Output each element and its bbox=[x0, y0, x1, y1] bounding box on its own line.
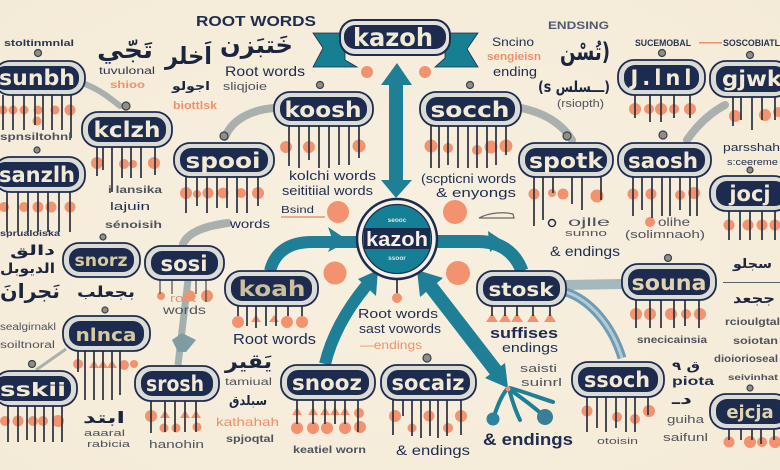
arrow head: lower left bbox=[358, 270, 378, 296]
node: koah bbox=[225, 271, 318, 328]
node: socaiz bbox=[381, 365, 476, 438]
text block: kathahah group: يَقير bbox=[224, 349, 272, 373]
orange badge small right bbox=[419, 66, 431, 78]
hub leg with dot bbox=[392, 278, 402, 303]
node: koosh: koosh bbox=[284, 98, 362, 122]
arrow: vertical double-headed bbox=[381, 63, 412, 198]
text block: far right column: dioiorioseal bbox=[714, 354, 778, 365]
text block: bottom right labels: saifunl bbox=[663, 432, 708, 444]
text block: suffixes: suinrl bbox=[521, 377, 562, 389]
node: sskii bbox=[0, 371, 77, 442]
connector: sosi to srosh bbox=[172, 280, 196, 365]
text block: top left arabic group: tuvulonal bbox=[99, 66, 155, 77]
arrow splayed ends bbox=[494, 388, 553, 420]
text block: kathahah group bbox=[216, 349, 279, 445]
node: bottom right bbox=[710, 394, 780, 448]
text block: kathahah group: tamiual bbox=[225, 377, 272, 388]
hub circle: kazoh: seooc bbox=[388, 217, 407, 224]
node: souna bbox=[622, 264, 716, 328]
text block: left mid: lajuin bbox=[110, 201, 150, 213]
orange badge upper left bbox=[327, 201, 349, 223]
text block: centre root words bbox=[358, 306, 442, 352]
text block: left arabic column: soiltnoral bbox=[0, 340, 55, 351]
text block: right mid: ojlle bbox=[568, 215, 611, 229]
text block: top centre endings: (s ـــسلس) bbox=[538, 78, 610, 96]
node: kelzh: kclzh bbox=[94, 118, 160, 142]
text block: top left arabic group: biottlsk bbox=[173, 100, 218, 112]
arrow: left curved from hub bbox=[270, 242, 360, 271]
node: sunbh bbox=[0, 61, 85, 138]
node: sosi: sosi bbox=[160, 252, 208, 276]
text block: right mid: olihe bbox=[658, 215, 690, 229]
text: & endings upper: & endings bbox=[550, 244, 620, 259]
node: koosh bbox=[274, 92, 373, 168]
text block: bottom right labels bbox=[597, 335, 714, 446]
connector: sunbh to kelzh bbox=[85, 84, 120, 106]
underline scribbles bbox=[281, 213, 514, 218]
text block: suffixes: saisti bbox=[520, 363, 557, 375]
text block: bottom left: ابتد bbox=[83, 408, 125, 427]
node: jnl bbox=[618, 60, 705, 122]
text block: bottom left bbox=[83, 408, 366, 456]
text block: bottom right labels: otoisin bbox=[597, 436, 638, 446]
node: srosh: srosh bbox=[146, 372, 204, 396]
text block: top left arabic group: spnsiltohnl bbox=[0, 132, 72, 143]
text block: top right labels: SOSCOBIATL bbox=[723, 38, 780, 48]
text block: sosi words: root bbox=[170, 293, 196, 305]
text block: suffixes bbox=[490, 325, 562, 389]
node: spotk bbox=[519, 143, 613, 226]
text block: left arabic column: الديوبل bbox=[0, 261, 55, 277]
text block: koosh words bbox=[229, 168, 377, 231]
arrow: right curved from hub bbox=[430, 242, 522, 271]
text block: far right column: سجلو bbox=[732, 257, 772, 272]
text block: bottom left: aaaral bbox=[84, 428, 125, 438]
text block: top left arabic group: تَجّي bbox=[97, 36, 153, 64]
text block: kathahah group: kathahah bbox=[216, 415, 279, 429]
orange badge small left bbox=[361, 66, 373, 78]
heading: endings: ENDSING bbox=[548, 20, 609, 32]
node: gjwk: gjwk bbox=[722, 67, 780, 91]
text block: top left arabic group: sliqjoie bbox=[223, 81, 267, 93]
text block: top centre endings: Sncino bbox=[492, 35, 534, 49]
text block: far right column: ججعد bbox=[733, 291, 775, 307]
node: sanzlh bbox=[0, 157, 85, 232]
text block: far right column bbox=[714, 257, 780, 382]
text block: top centre endings: ending bbox=[493, 65, 537, 79]
node: nlnca bbox=[63, 316, 150, 400]
node: bottom right: ejcja bbox=[726, 402, 774, 423]
node: ssoch bbox=[572, 362, 664, 432]
text block: bottom left: keatiel worn bbox=[293, 445, 366, 456]
node: spooi: spooi bbox=[186, 149, 260, 173]
node: souna: souna bbox=[632, 271, 706, 295]
text block: socch words bbox=[421, 171, 517, 200]
arrow head: right small bbox=[488, 231, 503, 252]
connector: socch to spotk bbox=[521, 108, 572, 140]
text block: top centre endings bbox=[487, 35, 610, 110]
banner: kazoh bbox=[313, 20, 478, 67]
text block: far right column: soiotan bbox=[733, 336, 778, 347]
text block: left arabic column: بجعلب bbox=[77, 283, 135, 301]
node: socaiz: socaiz bbox=[392, 371, 464, 395]
text: & endings lower: & endings bbox=[396, 443, 470, 458]
connector: stock to souna bbox=[566, 284, 622, 285]
text block: bottom right labels: snecicainsia bbox=[637, 335, 708, 346]
node: spooi bbox=[174, 143, 274, 213]
text block: bottom right labels: guiha bbox=[667, 414, 705, 426]
text block: right mid bbox=[565, 142, 780, 241]
text block: bottom right labels: ق ٩ bbox=[672, 359, 700, 373]
node: ssoch: ssoch bbox=[584, 368, 650, 392]
text block: bottom left: rabicia bbox=[87, 439, 130, 449]
text block: far right column: seivinhat bbox=[728, 372, 778, 382]
node: sunbh: sunbh bbox=[0, 66, 75, 90]
node: sanzlh: sanzlh bbox=[0, 163, 75, 187]
hub circle: kazoh: ssoor bbox=[388, 255, 406, 262]
text block: top left arabic group: shioo bbox=[110, 80, 145, 91]
node: snooz bbox=[281, 365, 375, 434]
orange badge upper right bbox=[443, 200, 467, 224]
node: saosh: saosh bbox=[628, 149, 698, 173]
text block: left arabic column bbox=[0, 243, 135, 351]
node: nlnca: nlnca bbox=[76, 325, 136, 346]
text block: left mid: i lansika bbox=[108, 185, 163, 196]
orange badge lower right bbox=[446, 261, 470, 285]
node: koah: koah bbox=[238, 277, 306, 301]
text block: top left arabic group: stoltinmnlal bbox=[4, 38, 74, 48]
connector: koosh to spooi bbox=[225, 108, 274, 137]
text: root words: Root words bbox=[233, 331, 316, 348]
node: sskii: sskii bbox=[0, 379, 66, 401]
text block: bottom right labels: دـ bbox=[670, 392, 692, 408]
text block: top left arabic group: Root words bbox=[225, 63, 305, 79]
text block: left mid: sprualoiska bbox=[0, 229, 61, 238]
text block: far right column: rcioulgtal bbox=[725, 317, 780, 328]
text block: right mid: parsshah bbox=[723, 142, 780, 154]
text block: left arabic column: دالق bbox=[10, 243, 55, 259]
text block: top centre endings: تُسْن) bbox=[560, 38, 610, 66]
text block: right mid: (solimnaoh) bbox=[625, 229, 705, 241]
orange badge lower left bbox=[324, 262, 346, 284]
node: snorz: snorz bbox=[74, 251, 128, 271]
text: & endings large: & endings bbox=[483, 430, 573, 449]
node: stock: stosk bbox=[488, 279, 554, 301]
text block: sosi words: words bbox=[162, 303, 206, 317]
text block: socch words: (scpticni words bbox=[421, 171, 517, 186]
text block: koosh words: Bsind bbox=[281, 205, 314, 216]
text block: right mid: s:ceereme bbox=[727, 157, 778, 167]
text block: suffixes: suffises bbox=[490, 325, 558, 342]
node: jocj bbox=[710, 176, 780, 240]
text block: left arabic column: نَجرانَ bbox=[0, 279, 60, 303]
text block: socch words: & enyongs bbox=[436, 185, 517, 200]
arrow: diagonal lower right bbox=[417, 270, 553, 426]
text block: top left arabic group: اجولو bbox=[171, 79, 210, 94]
node: jnl: J.lnl bbox=[628, 66, 692, 90]
node: gjwk bbox=[710, 61, 780, 130]
text block: top centre endings: (rsiopth) bbox=[557, 98, 604, 110]
text block: bottom left: hanohin bbox=[149, 439, 204, 451]
text block: centre root words: —endings bbox=[360, 338, 422, 352]
text block: left mid bbox=[0, 185, 163, 238]
node: saosh bbox=[618, 143, 711, 227]
arrow head: left bbox=[328, 227, 349, 252]
text block: top right labels: SUCEMOBAL bbox=[635, 38, 691, 48]
text block: kathahah group: سبلدق bbox=[229, 394, 267, 409]
connector: nlnca to sskii bbox=[36, 349, 66, 370]
text block: top left arabic group bbox=[0, 31, 305, 143]
text block: kathahah group: spjoqtal bbox=[226, 434, 274, 445]
text block: left mid: sénoisih bbox=[105, 220, 162, 231]
text block: top left arabic group: خَتبَزن bbox=[220, 31, 293, 59]
text block: centre root words: Root words bbox=[358, 306, 439, 321]
text block: left arabic column: sealgirnakl bbox=[0, 322, 56, 333]
text block: top left arabic group: اَخلر bbox=[164, 41, 212, 70]
node: snorz bbox=[63, 243, 140, 277]
text block: suffixes: endings bbox=[502, 340, 559, 355]
text block: bottom right labels: piota bbox=[672, 374, 714, 388]
hub circle: kazoh: kazoh bbox=[366, 229, 428, 251]
heading: root words: ROOT WORDS bbox=[196, 13, 316, 30]
connector: gjwk to saosh bbox=[687, 105, 725, 140]
banner: kazoh: kazoh bbox=[353, 23, 433, 52]
node: srosh bbox=[135, 366, 219, 433]
connector: stock to ssoch bbox=[566, 292, 622, 358]
node: stock bbox=[477, 271, 566, 322]
connector: words to sosi bbox=[183, 223, 228, 244]
node: kelzh bbox=[82, 112, 172, 192]
text block: right mid: sunno bbox=[565, 228, 607, 238]
text block: top right labels bbox=[635, 38, 780, 48]
node: jocj: jocj bbox=[728, 182, 771, 206]
node: sosi bbox=[145, 246, 224, 302]
text block: centre root words: sast vowords bbox=[359, 321, 442, 336]
text block: koosh words: words bbox=[229, 217, 270, 231]
text block: top centre endings: sengieisn bbox=[487, 51, 541, 63]
node: spotk: spotk bbox=[529, 149, 604, 173]
hub circle: kazoh bbox=[357, 199, 437, 279]
knobs above nodes bbox=[28, 50, 754, 391]
node: socch: socch bbox=[430, 98, 510, 122]
node: snooz: snooz bbox=[292, 371, 362, 395]
node: socch bbox=[420, 92, 521, 168]
arrow: diagonal lower left bbox=[325, 286, 366, 364]
text block: sosi words bbox=[162, 293, 206, 317]
text block: koosh words: kolchi words bbox=[289, 168, 377, 183]
text block: koosh words: seititiial words bbox=[282, 184, 373, 198]
